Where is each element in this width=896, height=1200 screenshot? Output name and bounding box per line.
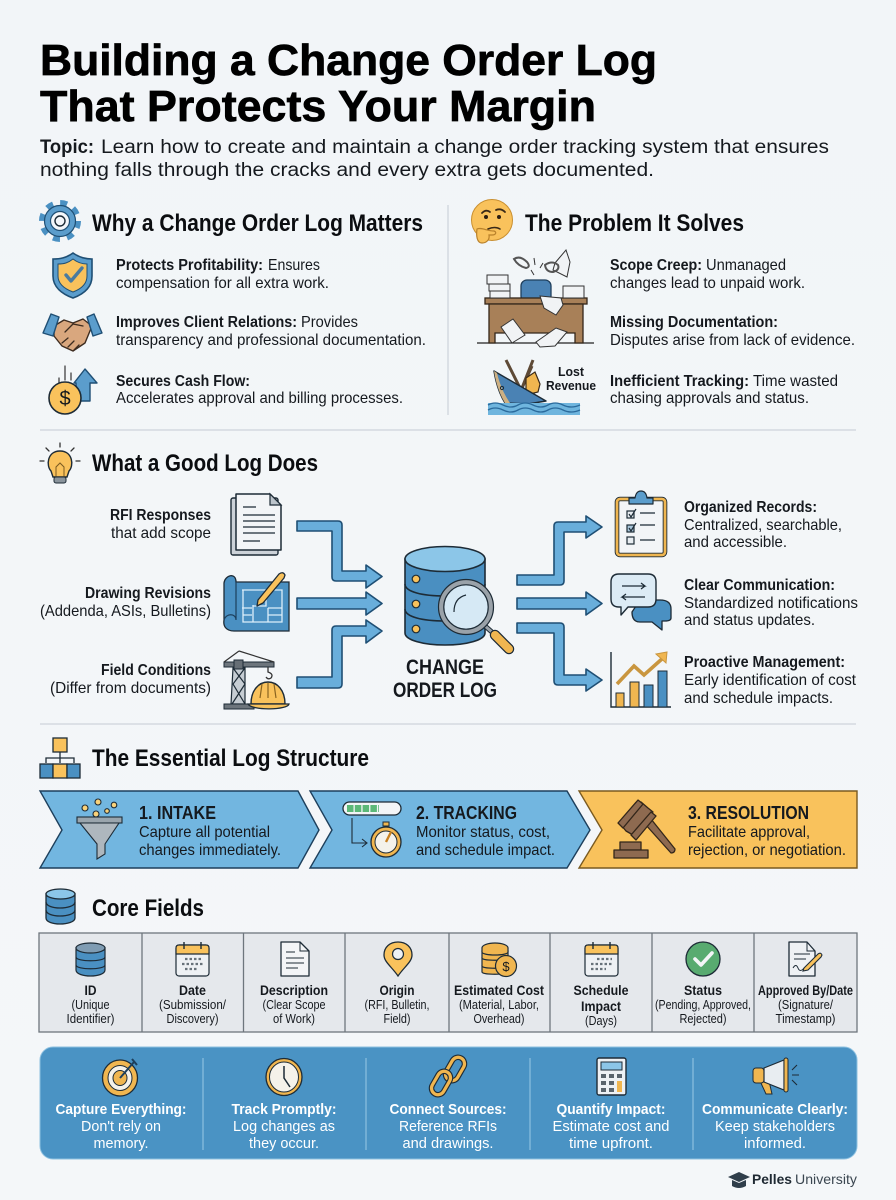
field: schedule impact: Schedule xyxy=(574,982,629,998)
icon: gavel xyxy=(614,800,675,858)
input: rfi responses label xyxy=(110,507,211,542)
tip: communicate clearly xyxy=(702,1058,848,1152)
tip: communicate clearly: Keep stakeholders xyxy=(715,1118,835,1135)
step: tracking: Monitor status, cost, xyxy=(416,824,550,841)
tip: quantify impact: time upfront. xyxy=(569,1135,653,1152)
step: intake: changes immediately. xyxy=(139,842,281,859)
field: estimated cost: Overhead) xyxy=(474,1012,524,1026)
input: field conditions label: Field Conditions xyxy=(101,662,211,679)
step: resolution: Facilitate approval, xyxy=(688,824,810,841)
icon: chat bubbles xyxy=(611,574,671,630)
icon: sinking ship: Lost xyxy=(558,365,585,379)
tip: communicate clearly: Communicate Clearly: xyxy=(702,1101,848,1118)
field: description xyxy=(260,942,328,1026)
heading: why a change order log matters: Why a Change Order Log Matters xyxy=(92,210,423,237)
field: estimated cost: (Material, Labor, xyxy=(459,998,539,1012)
step: tracking xyxy=(310,791,590,868)
input: drawing revisions label: Drawing Revisions xyxy=(85,585,211,602)
topic text block: nothing falls through the cracks and every extra gets documented. xyxy=(40,160,654,181)
tip: communicate clearly: informed. xyxy=(744,1135,806,1152)
text: clear communication: Clear Communication: xyxy=(684,577,835,594)
text: proactive management: Early identification of cost xyxy=(684,672,857,689)
icon: bar chart with trend arrow xyxy=(611,652,671,707)
table: core fields xyxy=(39,933,857,1032)
arrow: log to records xyxy=(517,516,602,585)
text: missing documentation: Disputes arise from lack of evidence. xyxy=(610,332,855,349)
tip: capture everything: Don't rely on xyxy=(81,1118,161,1135)
icon: light bulb xyxy=(40,443,80,483)
arrow: log to management xyxy=(517,623,602,691)
panel: the problem it solves xyxy=(472,200,855,415)
input: rfi responses label: RFI Responses xyxy=(110,507,211,524)
tip: connect sources: Reference RFIs xyxy=(399,1118,497,1135)
field: id xyxy=(66,943,114,1026)
panel: why a change order log matters xyxy=(42,203,426,414)
text: proactive management: and schedule impacts. xyxy=(684,690,833,707)
step: resolution: rejection, or negotiation. xyxy=(688,842,846,859)
icon: clipboard xyxy=(617,491,665,555)
icon: database with magnifier xyxy=(405,546,509,649)
tip: connect sources: and drawings. xyxy=(402,1135,494,1152)
tip: capture everything xyxy=(56,1059,186,1152)
text: inefficient tracking: Time wasted xyxy=(753,373,838,390)
step: resolution xyxy=(579,791,857,868)
step: intake: Capture all potential xyxy=(139,824,270,841)
icon: sinking ship xyxy=(488,360,596,415)
text: missing documentation xyxy=(610,314,855,349)
text: protects profitability: Ensures xyxy=(268,257,320,274)
footer logo: pelles university: Pelles xyxy=(752,1171,792,1187)
icon: crane and hard hat xyxy=(224,651,289,709)
panel: core fields xyxy=(39,889,857,1032)
field: status: Status xyxy=(684,982,722,998)
text: organized records: Organized Records: xyxy=(684,499,817,516)
field: origin: Field) xyxy=(384,1012,410,1026)
field: origin: (RFI, Bulletin, xyxy=(364,998,430,1012)
tip: track promptly: they occur. xyxy=(249,1135,319,1152)
text: clear communication: Standardized notifications xyxy=(684,595,858,612)
tip: connect sources xyxy=(390,1055,506,1152)
field: description: (Clear Scope xyxy=(262,998,326,1012)
heading: core fields: Core Fields xyxy=(92,895,204,922)
field: date: Date xyxy=(179,982,206,998)
arrow: log to communication xyxy=(517,592,602,615)
tip: track promptly xyxy=(232,1058,336,1152)
icon: database xyxy=(46,889,75,924)
text: protects profitability: Protects Profitability: xyxy=(116,257,263,274)
field: schedule impact xyxy=(574,942,629,1028)
tip: quantify impact xyxy=(552,1058,670,1152)
text: clear communication xyxy=(684,577,858,629)
icon: progress bar and stopwatch xyxy=(343,802,401,857)
heading: the essential log structure: The Essential Log Structure xyxy=(92,745,369,772)
text: inefficient tracking: Inefficient Tracking: xyxy=(610,373,749,390)
text: organized records: Centralized, searchable, xyxy=(684,517,842,534)
arrow: drawings to log xyxy=(297,592,382,615)
topic text block xyxy=(40,137,829,181)
topic text block: Topic: xyxy=(40,137,94,158)
field: approved by date: Timestamp) xyxy=(776,1012,836,1026)
text: inefficient tracking xyxy=(610,373,838,407)
step: tracking: and schedule impact. xyxy=(416,842,555,859)
field: status: (Pending, Approved, xyxy=(655,998,751,1012)
icon: document stack xyxy=(231,494,281,555)
label: change order log: CHANGE xyxy=(406,656,484,679)
icon: thinking face xyxy=(472,200,512,243)
footer logo: pelles university: University xyxy=(795,1171,857,1187)
panel: best practices banner xyxy=(40,1047,857,1159)
field: approved by date: Approved By/Date xyxy=(758,982,853,998)
text: missing documentation: Missing Documentation: xyxy=(610,314,778,331)
input: field conditions label: (Differ from documents) xyxy=(50,680,211,697)
panel: the essential log structure xyxy=(40,738,857,868)
text: proactive management: Proactive Management: xyxy=(684,654,845,671)
icon: sinking ship: Revenue xyxy=(546,379,596,393)
input: drawing revisions label xyxy=(40,585,211,620)
field: schedule impact: (Days) xyxy=(585,1014,617,1028)
text: proactive management xyxy=(684,654,857,707)
panel: what a good log does xyxy=(40,443,858,709)
topic text block: Learn how to create and maintain a change order tracking system that ensures xyxy=(101,137,829,158)
heading: what a good log does: What a Good Log Does xyxy=(92,450,318,477)
tip: quantify impact: Estimate cost and xyxy=(552,1118,670,1135)
field: approved by date xyxy=(758,942,853,1026)
tip: track promptly: Track Promptly: xyxy=(232,1101,336,1118)
input: field conditions label xyxy=(50,662,211,697)
step: intake: 1. INTAKE xyxy=(139,803,216,823)
text: clear communication: and status updates. xyxy=(684,612,815,629)
tip: quantify impact: Quantify Impact: xyxy=(556,1101,666,1118)
text: improves client relations xyxy=(116,314,426,349)
text: organized records xyxy=(684,499,842,551)
icon: cash flow coin and arrow xyxy=(49,366,97,414)
text: scope creep: Unmanaged xyxy=(706,257,786,274)
icon: gear xyxy=(42,203,78,239)
input: rfi responses label: that add scope xyxy=(111,525,211,542)
title xyxy=(40,36,657,131)
label: change order log xyxy=(393,656,497,702)
field: origin xyxy=(364,942,430,1026)
title: Building a Change Order Log xyxy=(40,36,657,85)
field: date: Discovery) xyxy=(166,1012,218,1026)
tip: capture everything: Capture Everything: xyxy=(56,1101,186,1118)
input: drawing revisions label: (Addenda, ASIs, Bulletins) xyxy=(40,603,211,620)
field: status: Rejected) xyxy=(680,1012,726,1026)
heading: the problem it solves: The Problem It Solves xyxy=(525,210,744,237)
field: description: Description xyxy=(260,982,328,998)
field: id: Identifier) xyxy=(66,1012,114,1026)
icon: hierarchy xyxy=(40,738,80,778)
text: improves client relations: Provides xyxy=(301,314,358,331)
field: estimated cost: $ xyxy=(502,959,510,974)
text: inefficient tracking: chasing approvals and status. xyxy=(610,390,809,407)
icon: messy desk xyxy=(477,250,594,347)
text: organized records: and accessible. xyxy=(684,534,787,551)
text: scope creep: changes lead to unpaid work. xyxy=(610,275,805,292)
field: approved by date: (Signature/ xyxy=(778,998,833,1012)
field: status xyxy=(655,942,751,1026)
text: protects profitability xyxy=(116,257,329,292)
field: date xyxy=(159,942,226,1026)
tip: capture everything: memory. xyxy=(94,1135,148,1152)
footer logo: pelles university xyxy=(728,1171,857,1188)
text: scope creep: Scope Creep: xyxy=(610,257,702,274)
tip: connect sources: Connect Sources: xyxy=(390,1101,506,1118)
icon: funnel xyxy=(77,799,122,859)
field: description: of Work) xyxy=(273,1012,315,1026)
field: estimated cost: Estimated Cost xyxy=(454,982,544,998)
title: That Protects Your Margin xyxy=(40,82,596,131)
arrow: field to log xyxy=(297,620,382,688)
text: improves client relations: transparency and professional documentation. xyxy=(116,332,426,349)
field: id: (Unique xyxy=(72,998,110,1012)
icon: handshake xyxy=(43,314,102,351)
text: protects profitability: compensation for all extra work. xyxy=(116,275,329,292)
icon: blueprint and pencil xyxy=(224,573,289,631)
tip: track promptly: Log changes as xyxy=(233,1118,335,1135)
text: improves client relations: Improves Client Relations: xyxy=(116,314,297,331)
label: change order log: ORDER LOG xyxy=(393,679,497,702)
step: tracking: 2. TRACKING xyxy=(416,803,517,823)
field: date: (Submission/ xyxy=(159,998,226,1012)
step: resolution: 3. RESOLUTION xyxy=(688,803,809,823)
icon: cash flow coin and arrow: $ xyxy=(59,388,71,410)
step: intake xyxy=(40,791,319,868)
text: secures cash flow: Secures Cash Flow: xyxy=(116,373,250,390)
field: estimated cost xyxy=(454,943,544,1026)
text: scope creep xyxy=(610,257,805,292)
text: secures cash flow: Accelerates approval and billing processes. xyxy=(116,390,403,407)
field: origin: Origin xyxy=(380,982,414,998)
field: id: ID xyxy=(84,982,96,998)
text: secures cash flow xyxy=(116,373,403,407)
arrow: rfi to log xyxy=(297,521,382,588)
field: schedule impact: Impact xyxy=(581,998,621,1014)
icon: shield xyxy=(53,253,92,298)
